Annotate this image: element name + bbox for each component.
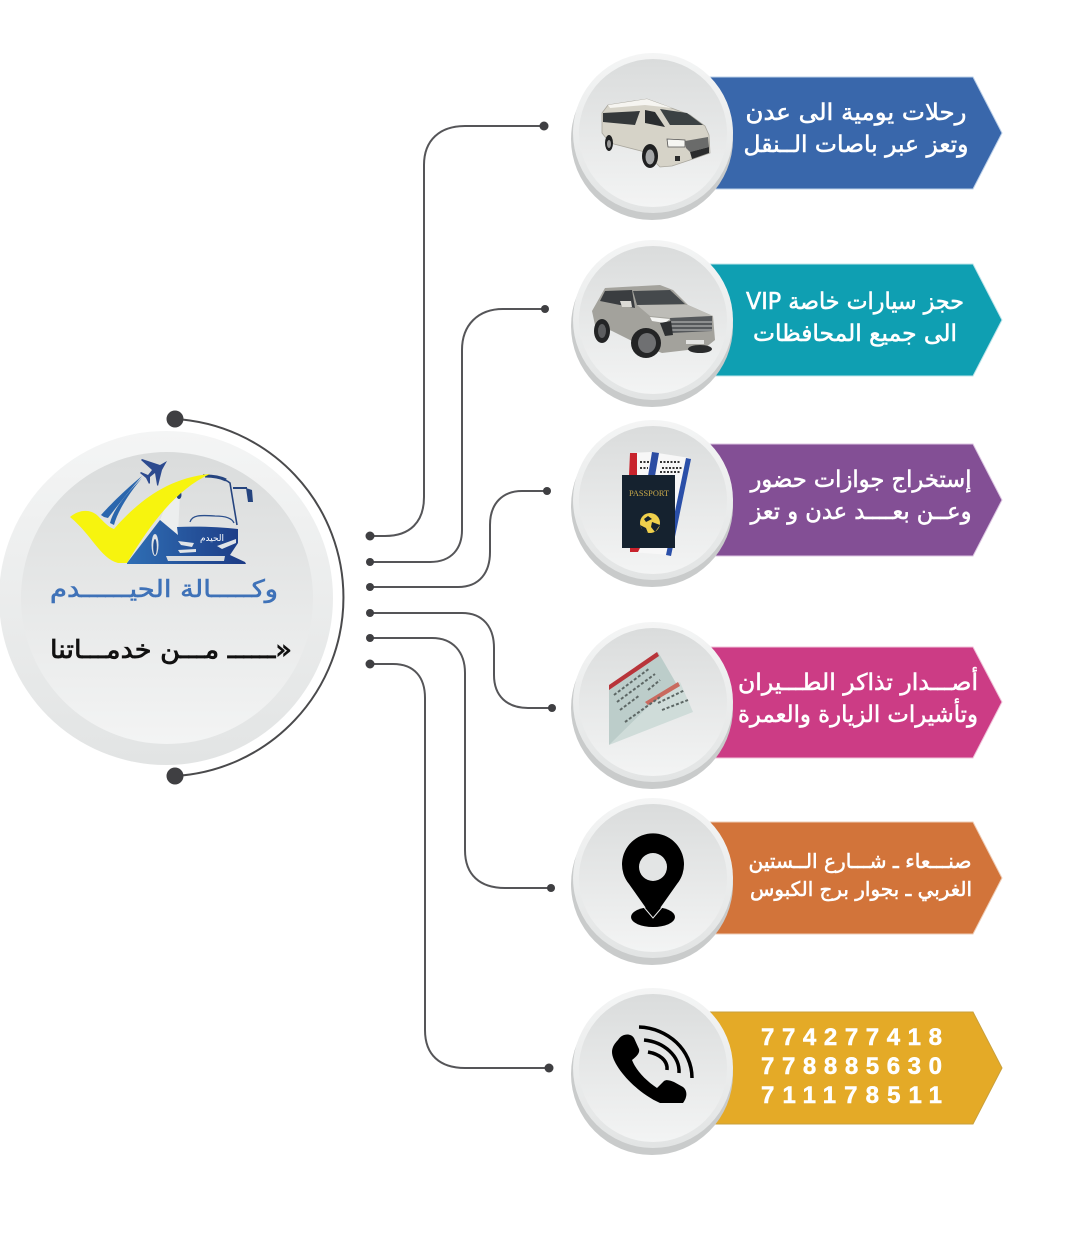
banner 3: إستخراج جوازات حضور [750,467,972,493]
badge 3 with passport [571,420,733,587]
icon: phone [612,1027,692,1103]
icon: van [602,99,710,168]
banner 6 [700,1012,1002,1124]
banner 4: وتأشيرات الزيارة والعمرة [738,698,978,728]
badge 4 with air tickets [571,622,733,789]
banner 5: الغربي ـ بجوار برج الكبوس [750,877,972,902]
icon: SUV [592,285,715,358]
banner 3 [700,444,1002,556]
connector 4 [366,609,556,712]
services heading: «ــــــ مـــن خدمـــاتنا [50,635,292,664]
banner 6: 774277418 [761,1024,942,1051]
banner 6: 778885630 [761,1053,942,1080]
banner 2 [700,264,1002,376]
banner 1: رحلات يومية الى عدن [746,100,966,126]
banner 4 [700,647,1002,758]
banner 1: وتعز عبر باصات الــنقل [744,132,968,158]
connector 2 [366,305,549,566]
banner 3: وعــن بعــــد عدن و تعز [750,499,972,525]
connector 6 [366,660,554,1072]
icon: passport and tickets [622,452,691,556]
icon: air tickets [609,652,693,745]
banner 1 [700,77,1002,189]
banner 5: صنـــعاء ـ شـــارع الــستين [748,849,972,873]
badge 2 with SUV [571,240,733,407]
connector 3 [366,487,551,591]
banner 5 [700,822,1002,934]
logo: airplane, check mark and bus: الحيدم [200,534,224,544]
banner 2: حجز سيارات خاصة VIP [746,289,964,315]
agency name: وكـــــالة الحيــــــدم [50,575,278,603]
badge 5 with location pin [571,798,733,965]
logo: airplane, check mark and bus [70,459,253,564]
outer arc around central circle [166,410,343,784]
central circle [0,431,333,765]
banner 2: الى جميع المحافظات [753,321,957,347]
icon: passport and tickets: PASSPORT [629,489,669,498]
badge 1 with van [571,53,733,220]
icon: location pin [622,833,684,927]
connector 5 [366,634,555,892]
banner 4: أصـــدار تذاكر الطـــيران [738,667,978,696]
banner 6: 711178511 [761,1082,942,1109]
connector 1 [366,122,548,540]
badge 6 with phone [571,988,733,1155]
